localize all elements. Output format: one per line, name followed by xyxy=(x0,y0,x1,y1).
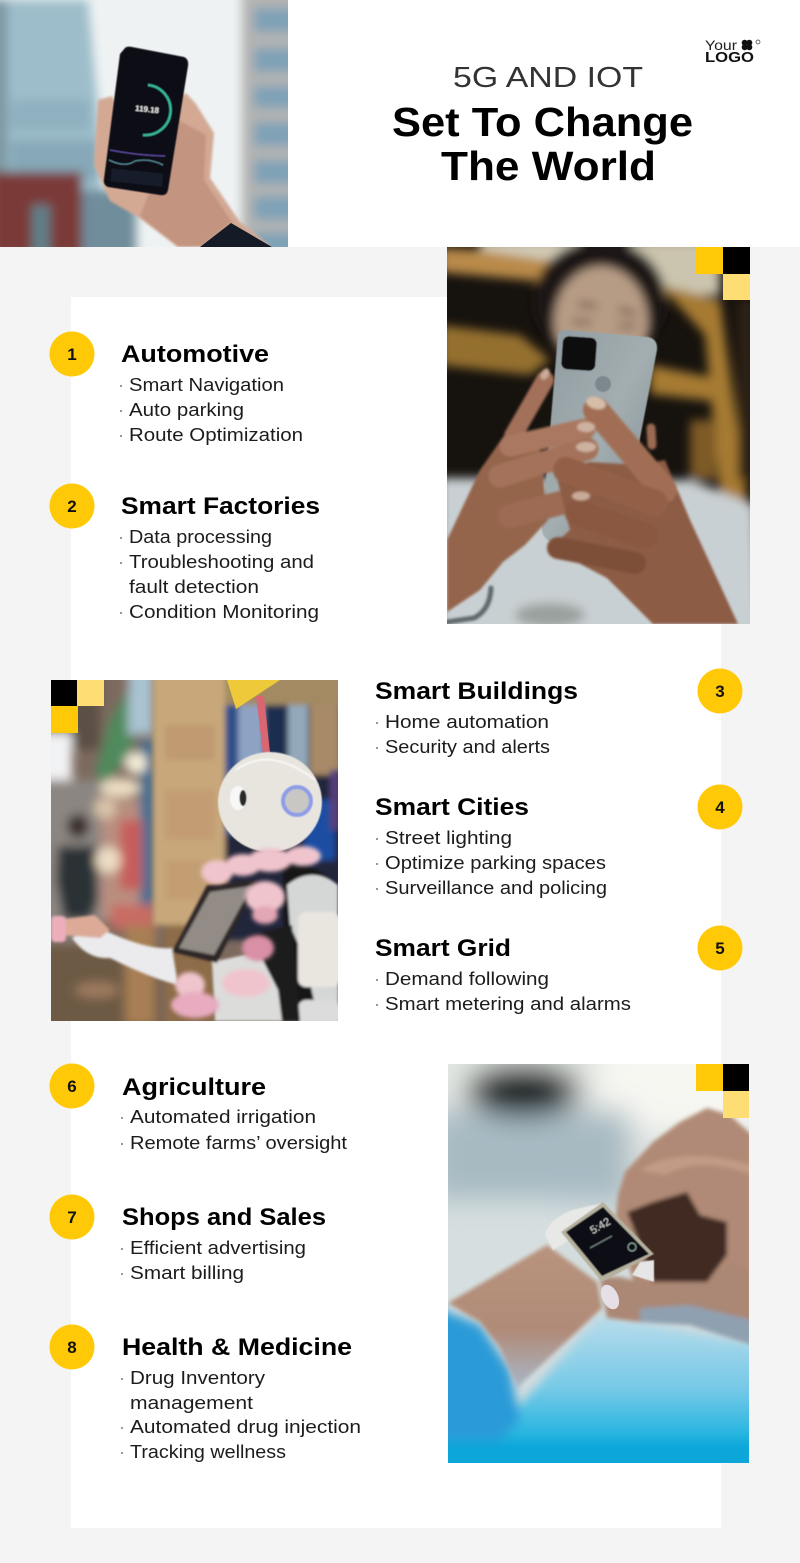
list: Smart metering and alarms xyxy=(385,993,631,1014)
hand xyxy=(600,1108,752,1345)
list: Smart Navigation xyxy=(129,374,284,395)
header white band xyxy=(0,0,800,247)
heading: Smart Cities xyxy=(375,794,529,821)
list xyxy=(120,526,319,622)
item 6: agriculture xyxy=(50,1064,347,1153)
list: Remote farms’ oversight xyxy=(130,1132,347,1153)
number badge 8: 8 xyxy=(67,1338,77,1357)
heading: Smart Factories xyxy=(121,493,320,520)
number badge 5 xyxy=(698,926,742,970)
photo: man looking at phone xyxy=(447,247,750,624)
item 4: smart cities xyxy=(375,784,742,898)
main title line 1: Set To Change xyxy=(392,99,693,145)
number badge 3: 3 xyxy=(715,682,725,701)
item 2: smart factories xyxy=(50,484,320,622)
list: Auto parking xyxy=(129,399,244,420)
list: Optimize parking spaces xyxy=(385,852,606,873)
item 5: smart grid xyxy=(375,926,742,1014)
phone: 119.18 xyxy=(135,104,160,115)
watch xyxy=(545,1202,654,1282)
heading: Health & Medicine xyxy=(122,1334,352,1361)
corner squares: watch photo xyxy=(696,1064,749,1118)
list xyxy=(121,1106,347,1153)
number badge 5: 5 xyxy=(715,939,725,958)
list: fault detection xyxy=(129,576,259,597)
item 7: shops and sales xyxy=(50,1194,326,1283)
forearm xyxy=(448,1245,602,1388)
list: Tracking wellness xyxy=(130,1441,286,1462)
photo: smartwatch on wrist xyxy=(448,1064,749,1463)
number badge 6 xyxy=(50,1064,94,1108)
heading: Smart Buildings xyxy=(375,678,578,705)
heading: Shops and Sales xyxy=(122,1204,326,1231)
heading: title block xyxy=(392,62,693,189)
watch: 5:42 xyxy=(588,1216,613,1237)
item 1: automotive xyxy=(50,332,303,445)
logo: Your xyxy=(705,37,737,53)
list xyxy=(376,711,550,757)
list xyxy=(121,1237,306,1283)
corner squares: man photo xyxy=(696,247,750,300)
white content panel xyxy=(71,297,721,1528)
number badge 6: 6 xyxy=(67,1077,77,1096)
subtitle: 5G AND IOT xyxy=(453,62,643,94)
list: Data processing xyxy=(129,526,272,547)
item 8: health and medicine xyxy=(50,1324,361,1462)
heading: Agriculture xyxy=(122,1074,266,1101)
list: Street lighting xyxy=(385,827,512,848)
corner squares: robot photo xyxy=(51,680,104,733)
number badge 8 xyxy=(50,1324,94,1370)
hands xyxy=(447,367,738,624)
number badge 2: 2 xyxy=(67,497,77,516)
logo: LOGO xyxy=(705,50,754,66)
list: Automated irrigation xyxy=(130,1106,316,1127)
hand xyxy=(94,93,272,247)
photo: robot xyxy=(51,680,338,1021)
list: Security and alerts xyxy=(385,736,550,757)
list: Troubleshooting and xyxy=(129,551,314,572)
main title line 2: The World xyxy=(441,143,656,189)
number badge 7: 7 xyxy=(67,1208,77,1227)
number badge 4: 4 xyxy=(715,798,725,817)
list: Efficient advertising xyxy=(130,1237,306,1258)
list: Route Optimization xyxy=(129,424,303,445)
list: Home automation xyxy=(385,711,549,732)
number badge 1 xyxy=(50,332,94,376)
number badge 7 xyxy=(50,1194,94,1240)
phone xyxy=(104,47,188,195)
photo: hand holding smartphone xyxy=(0,0,298,257)
list: Demand following xyxy=(385,968,549,989)
list xyxy=(376,968,631,1014)
child's hand xyxy=(55,915,110,938)
list: Condition Monitoring xyxy=(129,601,319,622)
robot body xyxy=(218,752,322,852)
item 3: smart buildings xyxy=(375,668,742,757)
number badge 4 xyxy=(698,784,742,830)
number badge 1: 1 xyxy=(67,345,77,364)
yellow tag xyxy=(227,680,280,709)
number badge 2 xyxy=(50,484,94,528)
phone xyxy=(542,330,657,542)
number badge 3 xyxy=(698,668,742,714)
list: management xyxy=(130,1392,253,1413)
list: Smart billing xyxy=(130,1262,244,1283)
list xyxy=(120,374,303,445)
list: Drug Inventory xyxy=(130,1367,266,1388)
logo xyxy=(705,37,760,66)
sleeve xyxy=(200,223,272,247)
list xyxy=(376,827,607,898)
tablet xyxy=(172,880,258,963)
heading: Smart Grid xyxy=(375,935,511,962)
list: Surveillance and policing xyxy=(385,877,607,898)
heading: Automotive xyxy=(121,341,269,368)
blue shirt xyxy=(448,1304,749,1463)
flower garland xyxy=(171,846,321,1018)
list xyxy=(121,1367,361,1462)
list: Automated drug injection xyxy=(130,1416,361,1437)
